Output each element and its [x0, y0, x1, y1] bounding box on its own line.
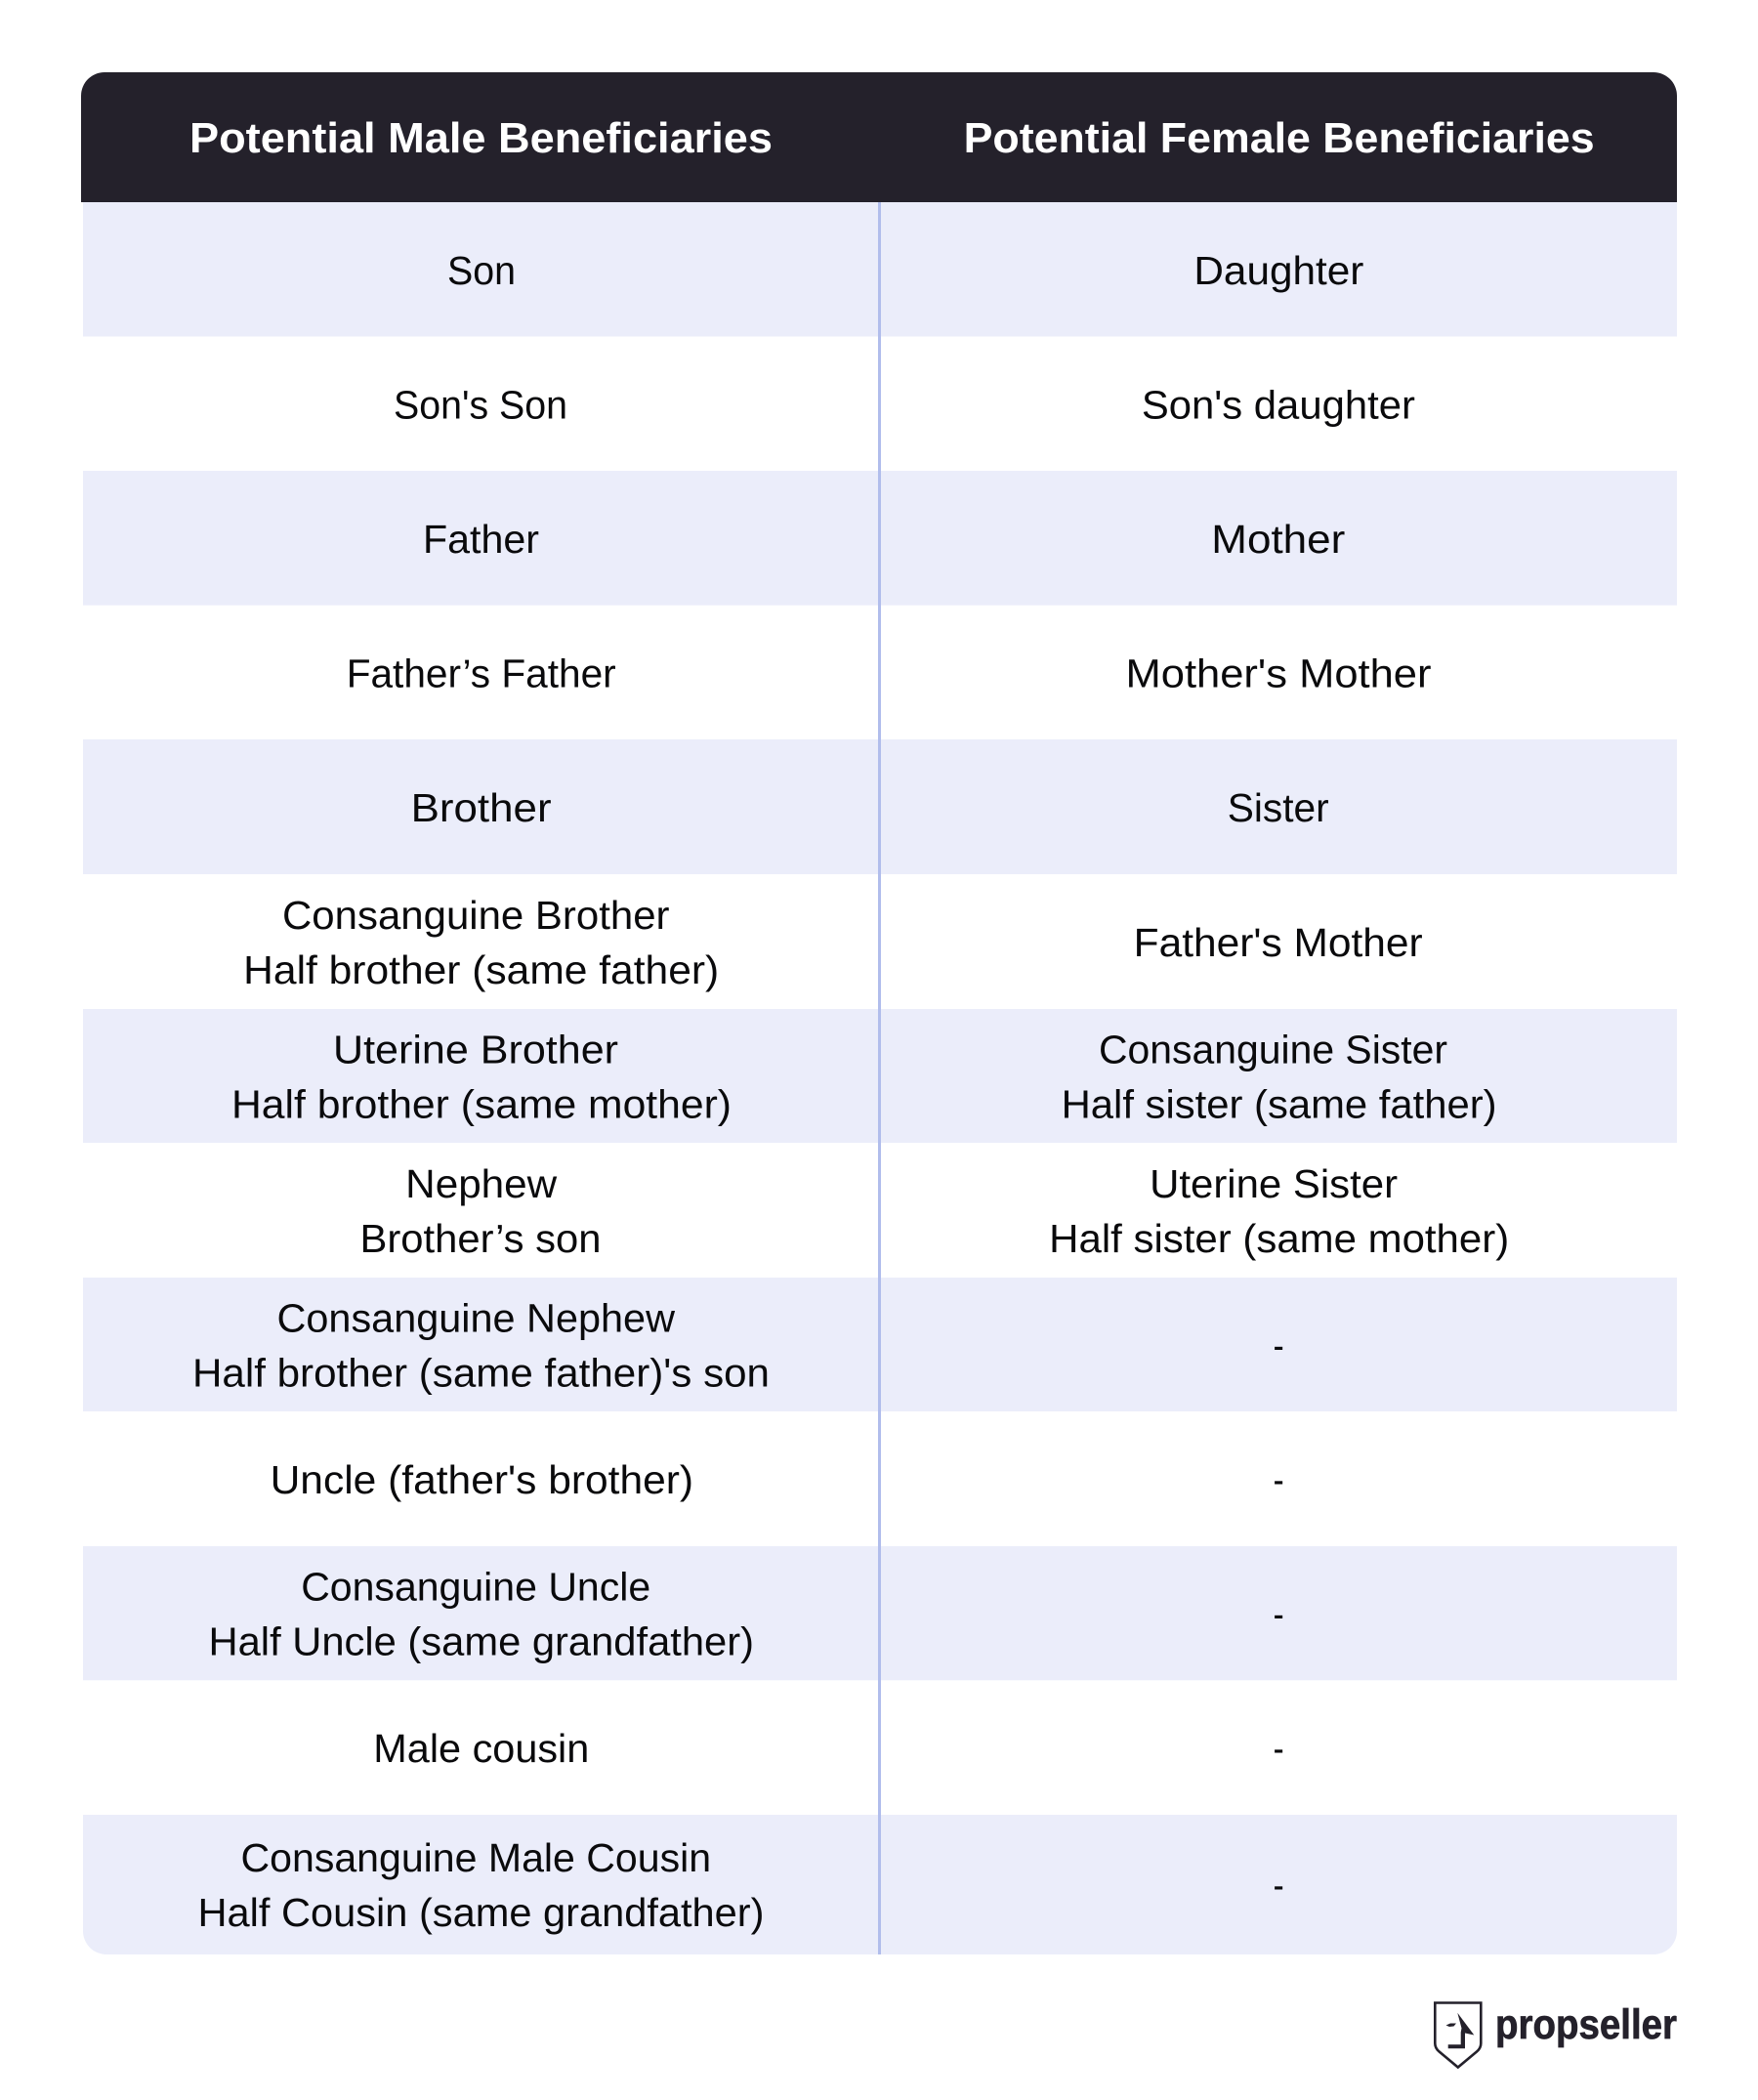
- row 13: -: [1274, 1863, 1284, 1908]
- row 12: -: [1274, 1726, 1284, 1771]
- row 11: Consanguine Uncle: [301, 1565, 650, 1610]
- icon: shield with face profile: [1435, 2002, 1481, 2067]
- row 13: Consanguine Male Cousin: [240, 1835, 711, 1880]
- row 10: Uncle (father's brother): [271, 1457, 693, 1502]
- row 7: Half brother (same mother): [231, 1082, 732, 1127]
- row 13: [197, 1835, 1284, 1935]
- row 7: Uterine Brother: [333, 1028, 618, 1072]
- row 1: [447, 248, 1363, 293]
- row 8: Half sister (same mother): [1049, 1216, 1509, 1261]
- row 4: [347, 651, 1432, 695]
- row 6: [243, 893, 1423, 992]
- heading: male beneficiaries: Potential Male Beneficiaries: [189, 114, 773, 162]
- row 7: [231, 1028, 1497, 1127]
- heading: female beneficiaries: Potential Female Beneficiaries: [964, 114, 1595, 162]
- row 2: [394, 382, 1415, 427]
- row 6: Half brother (same father): [243, 947, 719, 992]
- row 1: Daughter: [1193, 248, 1363, 293]
- row 9: Half brother (same father)'s son: [192, 1350, 770, 1395]
- row 1: Son: [447, 248, 516, 293]
- row backgrounds: [83, 202, 1677, 1954]
- row 13: Half Cousin (same grandfather): [197, 1890, 765, 1935]
- row 9: Consanguine Nephew: [277, 1295, 675, 1340]
- row 2: Son's Son: [394, 382, 567, 427]
- row 3: Father: [423, 517, 539, 562]
- row 9: [192, 1295, 1284, 1395]
- row 8: Uterine Sister: [1150, 1161, 1398, 1206]
- table body: [83, 202, 1677, 1954]
- row 12: Male cousin: [373, 1726, 589, 1771]
- row 8: Brother’s son: [359, 1216, 602, 1261]
- row 3: Mother: [1211, 517, 1345, 562]
- row 6: Consanguine Brother: [282, 893, 670, 938]
- row 9: -: [1274, 1323, 1284, 1367]
- row 3: [423, 517, 1345, 562]
- column divider: [878, 202, 881, 1954]
- row 11: [209, 1565, 1284, 1664]
- row 5: [411, 785, 1329, 830]
- row 5: Brother: [411, 785, 552, 830]
- wordmark: propseller: [1495, 2001, 1677, 2048]
- row 10: -: [1274, 1457, 1284, 1502]
- row 4: Mother's Mother: [1125, 651, 1432, 695]
- row 7: Consanguine Sister: [1099, 1028, 1447, 1072]
- row 12: [373, 1726, 1284, 1771]
- logo: propseller: [1435, 2001, 1677, 2067]
- row 11: Half Uncle (same grandfather): [209, 1619, 754, 1664]
- row 10: [271, 1457, 1284, 1502]
- row 11: -: [1274, 1592, 1284, 1637]
- row 7: Half sister (same father): [1062, 1082, 1497, 1127]
- row 8: [359, 1161, 1509, 1261]
- row 2: Son's daughter: [1142, 382, 1415, 427]
- row 8: Nephew: [405, 1161, 558, 1206]
- table header: [81, 72, 1677, 202]
- row 4: Father’s Father: [347, 651, 616, 695]
- row 5: Sister: [1228, 785, 1329, 830]
- row 6: Father's Mother: [1134, 920, 1423, 965]
